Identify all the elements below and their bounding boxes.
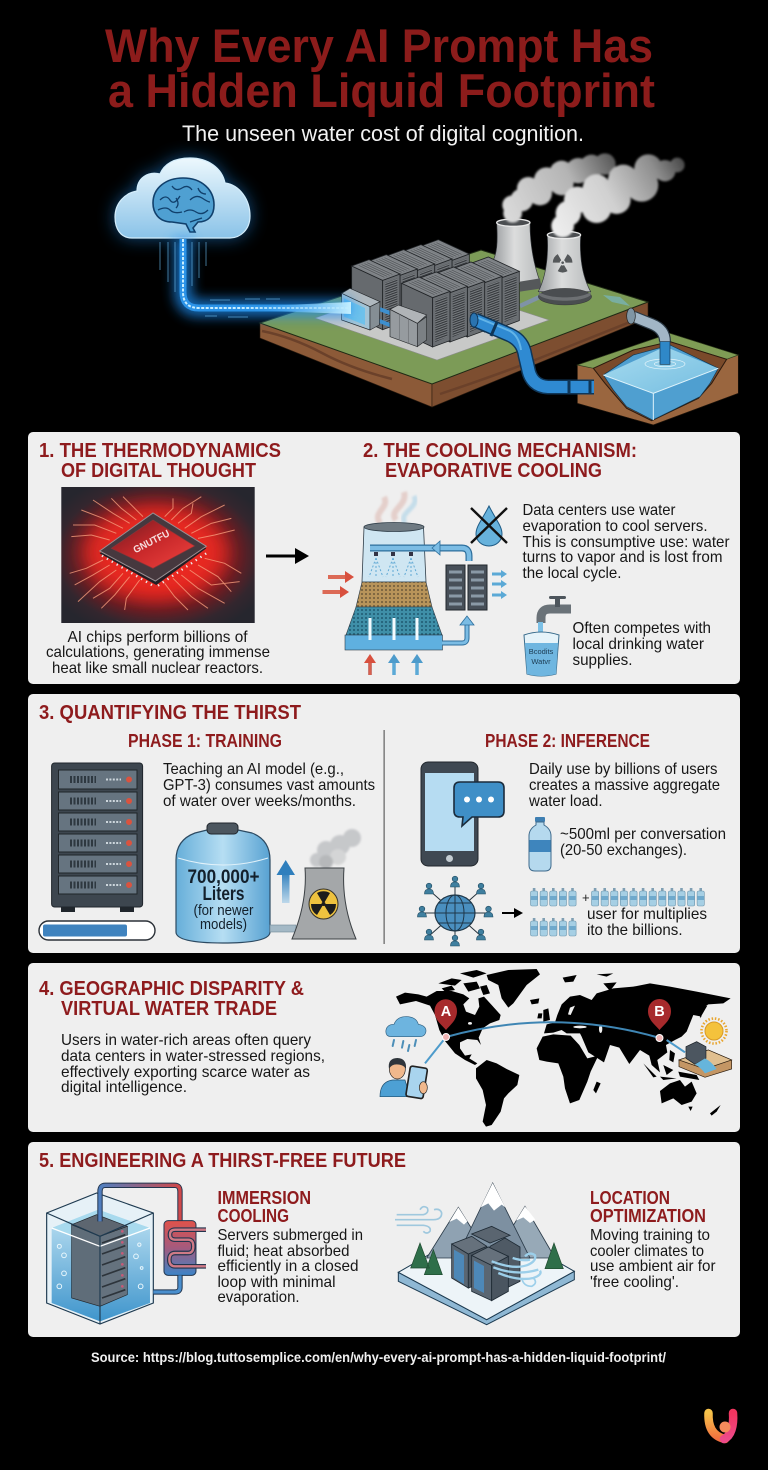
ground slab with soil bbox=[260, 250, 648, 407]
icon: water tank with 700,000+ liters: Liters bbox=[202, 884, 244, 905]
heading: immersion cooling: COOLING bbox=[218, 1205, 289, 1226]
hero illustration: cloud to data center and water bbox=[115, 153, 738, 425]
heading: section 1: OF DIGITAL THOUGHT bbox=[61, 459, 256, 482]
icon: rain cloud bbox=[386, 1017, 426, 1051]
icon: faucet and glass of drinking water: Bcodits bbox=[529, 647, 554, 656]
heading: location optimization: LOCATION bbox=[590, 1187, 670, 1208]
text: immersion cooling: efficiently in a closed bbox=[218, 1258, 358, 1275]
heading: section 2: 2. THE COOLING MECHANISM: bbox=[363, 439, 637, 462]
subtitle: The unseen water cost of digital cognition. bbox=[182, 121, 584, 146]
icon: water tank with 700,000+ liters bbox=[176, 823, 270, 943]
heading: section 2 bbox=[363, 439, 637, 482]
diagram: immersion cooling tank bbox=[47, 1185, 206, 1324]
panel: section 5 thirst-free future bbox=[28, 1142, 740, 1337]
route arc between pins bbox=[446, 1022, 660, 1038]
text: per conversation: (20-50 exchanges). bbox=[560, 842, 687, 859]
heading: location optimization bbox=[590, 1187, 706, 1226]
heading: section 4: 4. GEOGRAPHIC DISPARITY & bbox=[39, 977, 304, 1000]
text: per conversation bbox=[560, 826, 726, 859]
text: location optimization bbox=[590, 1227, 716, 1291]
icon: sun bbox=[702, 1018, 726, 1044]
title bbox=[105, 19, 655, 117]
icon: phone with chat bubble bbox=[421, 762, 504, 866]
text: drinking water competition: local drinking water bbox=[572, 636, 705, 653]
diagram: data center in cold mountains bbox=[395, 1183, 574, 1325]
text: consumptive use: This is consumptive use: water bbox=[522, 534, 730, 551]
text: location optimization: cooler climates to bbox=[590, 1243, 704, 1260]
text: chip heat: heat like small nuclear reactors. bbox=[52, 660, 263, 677]
heading: section 4: VIRTUAL WATER TRADE bbox=[61, 997, 277, 1020]
heading: section 5: 5. ENGINEERING A THIRST-FREE FUTURE bbox=[39, 1149, 406, 1172]
text: virtual water export: data centers in water-stressed regions, bbox=[61, 1048, 325, 1065]
image: overheating AI chip: GNUTFU bbox=[132, 528, 172, 556]
text: virtual water export bbox=[61, 1032, 325, 1096]
text: consumptive use: the local cycle. bbox=[522, 565, 622, 582]
panel: sections 1 and 2 bbox=[28, 432, 740, 684]
text: consumptive use: evaporation to cool servers. bbox=[522, 518, 708, 535]
text: drinking water competition: Often competes with bbox=[572, 620, 711, 637]
logo bbox=[708, 1413, 733, 1439]
text: location optimization: use ambient air for bbox=[590, 1258, 716, 1275]
text: chip heat bbox=[46, 629, 270, 677]
icon: server rack bbox=[52, 763, 143, 912]
text: multiplies into the billions: ito the billions. bbox=[587, 922, 682, 939]
diagram: evaporative cooling tower bbox=[322, 492, 507, 675]
panel: section 3 quantifying the thirst bbox=[28, 694, 740, 953]
text: inference water: water load. bbox=[528, 793, 602, 810]
text: location optimization: Moving training to bbox=[590, 1227, 710, 1244]
heading: phase 1: PHASE 1: TRAINING bbox=[128, 731, 282, 751]
text: consumptive use bbox=[522, 502, 730, 582]
title: a Hidden Liquid Footprint bbox=[108, 64, 655, 117]
text: virtual water export: digital intelligence. bbox=[61, 1079, 187, 1096]
icon: crossed water drop bbox=[471, 506, 507, 546]
panel: section 4 geographic disparity bbox=[28, 963, 740, 1132]
text: multiplies into the billions: user for multiplies bbox=[587, 906, 707, 923]
text: location optimization: 'free cooling'. bbox=[590, 1274, 679, 1291]
glowing data pipe bbox=[160, 239, 351, 317]
blue water pipe bbox=[470, 313, 594, 394]
text: virtual water export: Users in water-rich areas often query bbox=[61, 1032, 311, 1049]
text: multiplies into the billions bbox=[587, 906, 707, 939]
icon: rows of small bottles: + bbox=[582, 890, 590, 905]
steam plumes bbox=[502, 153, 685, 237]
text: immersion cooling: fluid; heat absorbed bbox=[218, 1243, 350, 1260]
icon: faucet and glass of drinking water bbox=[524, 596, 571, 676]
text: chip heat: AI chips perform billions of bbox=[68, 629, 248, 646]
map pin B bbox=[648, 999, 671, 1042]
image: overheating AI chip bbox=[61, 487, 255, 623]
text: immersion cooling bbox=[218, 1227, 363, 1306]
heading: location optimization: OPTIMIZATION bbox=[590, 1205, 706, 1226]
icon: cooling tower with radiation symbol bbox=[270, 829, 361, 939]
map pin A bbox=[434, 999, 457, 1040]
text: training water: GPT-3) consumes vast amounts bbox=[163, 777, 375, 794]
text: per conversation: ~500ml per conversation bbox=[560, 826, 726, 843]
arrow: up from tank bbox=[276, 860, 295, 903]
icon: faucet and glass of drinking water: Watvr bbox=[531, 657, 551, 666]
heading: section 1: 1. THE THERMODYNAMICS bbox=[39, 439, 281, 462]
arrow: section 1 to section 2 bbox=[266, 548, 309, 564]
icon: water tank with 700,000+ liters: models) bbox=[200, 916, 247, 933]
icon: water bottle bbox=[529, 817, 551, 871]
heading: section 2: EVAPORATIVE COOLING bbox=[385, 459, 602, 482]
text: training water: of water over weeks/months. bbox=[163, 793, 356, 810]
text: immersion cooling: loop with minimal bbox=[218, 1274, 336, 1291]
text: inference water: Daily use by billions of users bbox=[529, 761, 718, 778]
icon: water tank with 700,000+ liters: (for newer bbox=[194, 902, 254, 919]
icon: rows of small bottles bbox=[530, 888, 704, 936]
heading: immersion cooling: IMMERSION bbox=[218, 1187, 311, 1208]
heading: section 4 bbox=[39, 977, 304, 1020]
text: consumptive use: Data centers use water bbox=[522, 502, 676, 519]
title: Why Every AI Prompt Has bbox=[105, 19, 653, 72]
icon: user with phone bbox=[380, 1040, 443, 1099]
text: training water bbox=[163, 761, 375, 810]
heading: phase 2: PHASE 2: INFERENCE bbox=[485, 731, 650, 751]
source line: Source: https://blog.tuttosemplice.com/en/why-every-ai-prompt-has-a-hidden-liquid-footprint/ bbox=[91, 1350, 666, 1365]
arrow: users to bottles bbox=[502, 908, 523, 918]
heading: section 3: 3. QUANTIFYING THE THIRST bbox=[39, 701, 301, 724]
text: consumptive use: turns to vapor and is lost from bbox=[522, 549, 722, 566]
icon: glowing cloud with brain bbox=[115, 158, 250, 238]
text: chip heat: calculations, generating immense bbox=[46, 644, 270, 661]
text: immersion cooling: evaporation. bbox=[218, 1289, 300, 1306]
text: inference water: creates a massive aggregate bbox=[529, 777, 720, 794]
map pin B: B bbox=[654, 1004, 665, 1020]
text: immersion cooling: Servers submerged in bbox=[218, 1227, 363, 1244]
world map bbox=[396, 969, 731, 1127]
pond with water intake bbox=[577, 308, 738, 425]
cooling towers bbox=[493, 219, 592, 306]
text: training water: Teaching an AI model (e.g., bbox=[163, 761, 344, 778]
heading: section 1 bbox=[39, 439, 281, 482]
text: virtual water export: effectively exporting scarce water as bbox=[61, 1064, 310, 1081]
text: inference water bbox=[528, 761, 720, 810]
icon: arid data center bbox=[667, 1040, 732, 1077]
heading: immersion cooling bbox=[218, 1187, 311, 1226]
icon: globe with users bbox=[418, 876, 493, 946]
icon: water tank with 700,000+ liters: 700,000+ bbox=[188, 867, 260, 888]
server racks bbox=[342, 240, 519, 347]
text: drinking water competition: supplies. bbox=[572, 652, 632, 669]
text: drinking water competition bbox=[572, 620, 711, 669]
map pin A: A bbox=[441, 1004, 452, 1020]
progress bar bbox=[39, 921, 155, 940]
